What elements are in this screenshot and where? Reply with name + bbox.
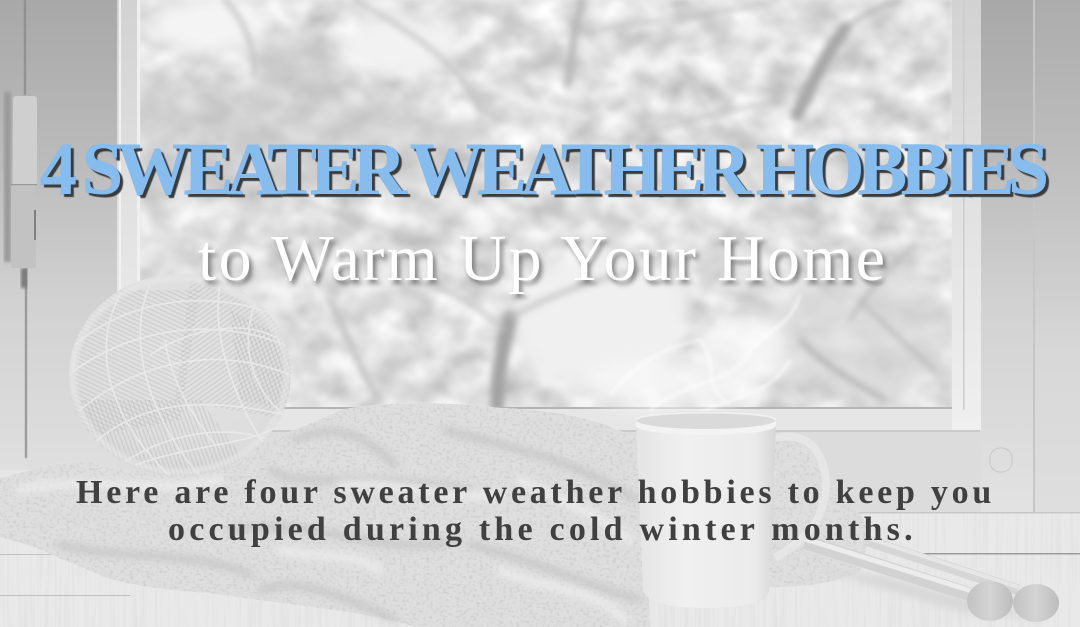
window view [140,0,952,410]
scarf [0,403,872,627]
steam [585,295,800,420]
intro text [76,474,995,548]
icon: mug [636,411,826,608]
icon: yarn ball [69,274,295,485]
icon: knitting needles [805,537,1059,622]
intro text: Here are four sweater weather hobbies to keep you [76,474,995,511]
intro text: occupied during the cold winter months. [168,511,917,548]
title: 4 SWEATER WEATHER HOBBIES [40,129,1042,211]
scarf right of mug [640,435,872,588]
icon: hinge [11,96,37,268]
subtitle: to Warm Up Your Home [198,222,887,295]
